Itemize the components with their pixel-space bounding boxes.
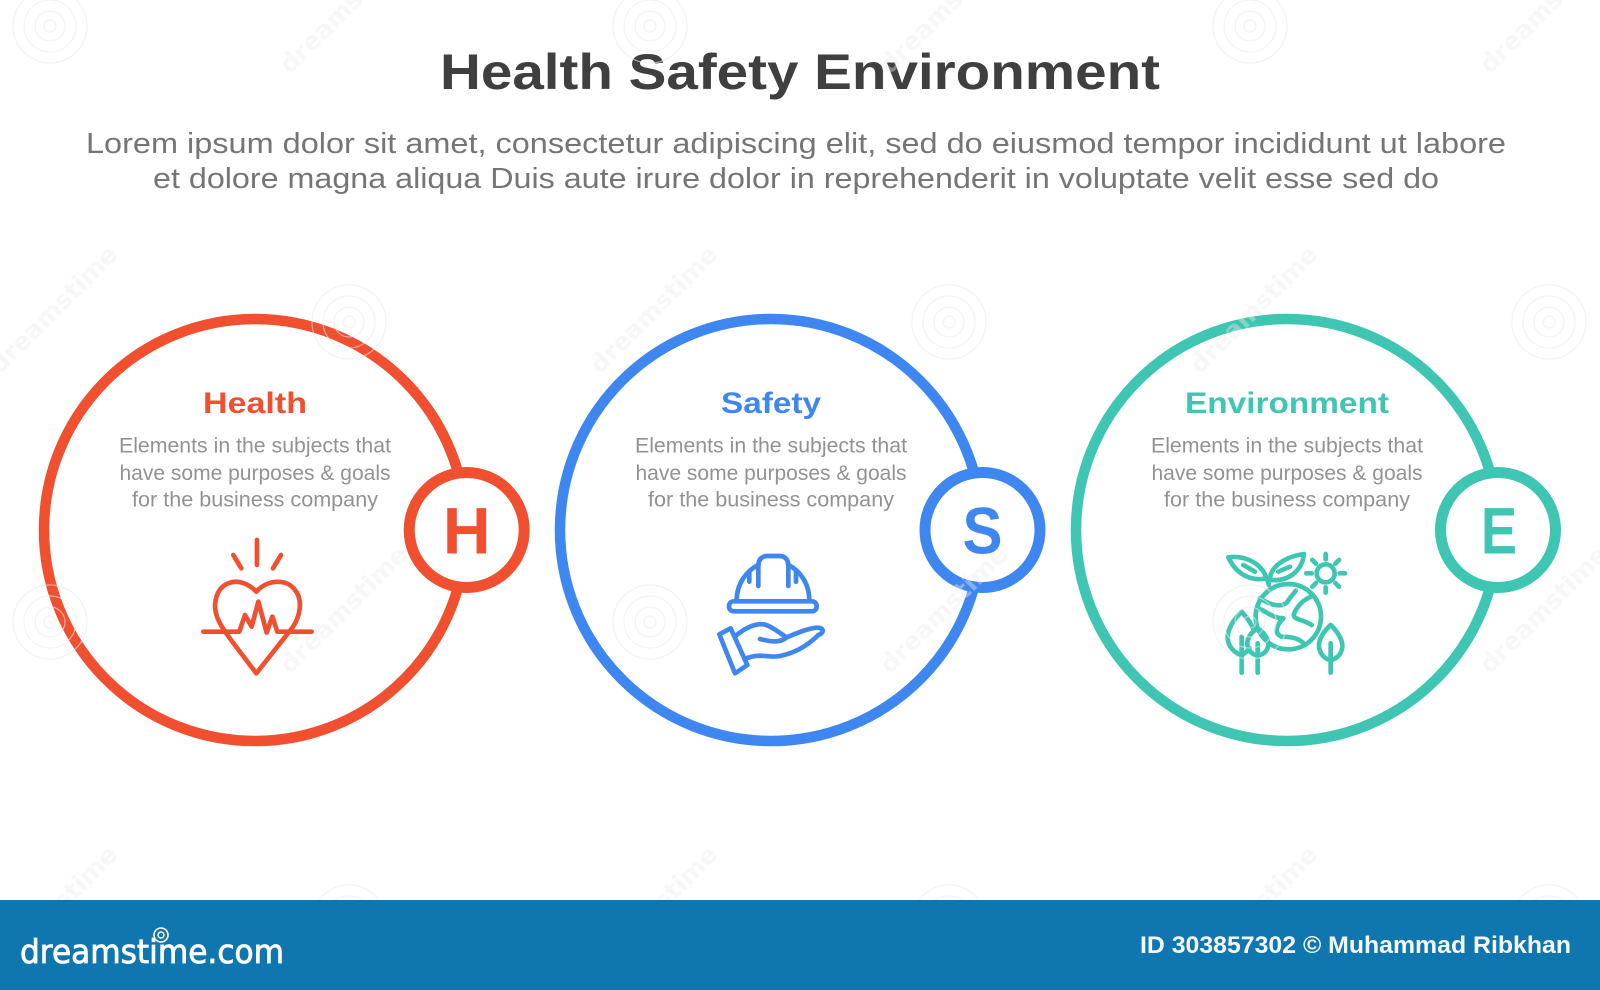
environment large ring	[1076, 319, 1498, 741]
health description: Elements in the subjects that	[119, 434, 391, 458]
subtitle text block: et dolore magna aliqua Duis aute irure dolor in reprehenderit in voluptate velit esse sed do	[153, 163, 1439, 195]
footer logo: dreamstime.com	[20, 932, 284, 971]
safety letter badge: S	[962, 493, 1002, 567]
safety letter badge	[925, 472, 1040, 588]
watermark wordmarks: dreamstime	[1184, 840, 1323, 979]
footer credit: ID 303857302 © Muhammad Ribkhan	[1140, 932, 1571, 959]
watermark wordmarks: dreamstime	[874, 540, 1013, 679]
safety description: for the business company	[648, 488, 894, 512]
watermark wordmarks: dreamstime	[584, 840, 723, 979]
environment description: Elements in the subjects that	[1151, 434, 1423, 458]
title: Health Safety Environment	[440, 44, 1160, 100]
safety description	[635, 434, 907, 512]
safety large ring	[560, 319, 982, 741]
watermark wordmarks: dreamstime	[584, 240, 723, 379]
environment description: have some purposes & goals	[1152, 461, 1422, 485]
panel: safety	[560, 319, 1040, 741]
panel: health	[44, 319, 524, 741]
panel: environment	[1076, 319, 1556, 741]
health description: for the business company	[132, 488, 378, 512]
safety heading: Safety	[721, 387, 821, 420]
footer banner	[0, 900, 1600, 990]
safety description: have some purposes & goals	[636, 461, 906, 485]
environment heading: Environment	[1185, 387, 1389, 420]
health letter badge	[409, 472, 524, 588]
icon: heart with pulse	[203, 540, 312, 673]
health description	[119, 434, 391, 512]
health large ring	[44, 319, 466, 741]
environment description: for the business company	[1164, 488, 1410, 512]
health letter badge: H	[443, 493, 491, 567]
watermark wordmarks: dreamstime	[1184, 240, 1323, 379]
watermark wordmarks: dreamstime	[274, 540, 413, 679]
environment letter badge: E	[1481, 493, 1517, 567]
subtitle text block	[86, 128, 1506, 195]
subtitle text block: Lorem ipsum dolor sit amet, consectetur adipiscing elit, sed do eiusmod tempor incididunt ut labore	[86, 128, 1506, 160]
icon: globe with plants and sun	[1228, 554, 1345, 673]
environment letter badge	[1440, 472, 1556, 588]
health description: have some purposes & goals	[120, 461, 390, 485]
environment description	[1151, 434, 1423, 512]
safety description: Elements in the subjects that	[635, 434, 907, 458]
icon: hard hat over hand	[719, 556, 823, 673]
health heading: Health	[203, 387, 307, 420]
